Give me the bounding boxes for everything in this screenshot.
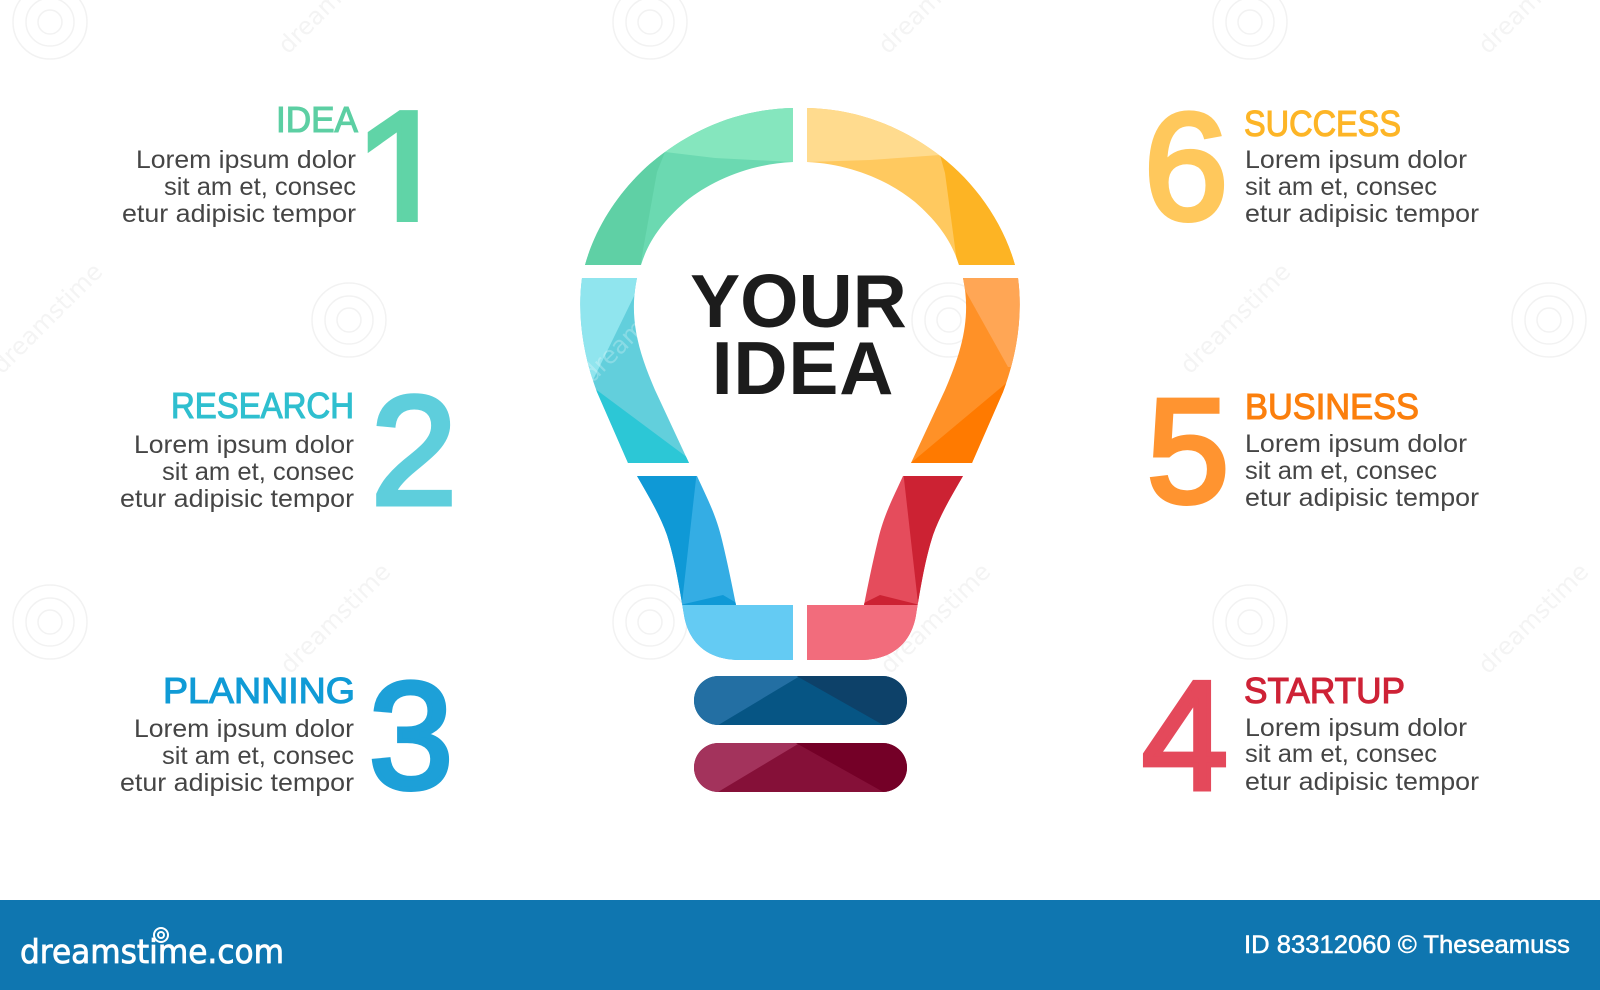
text block — [1245, 714, 1479, 796]
text block: Lorem ipsum dolor — [134, 715, 354, 743]
text block — [120, 431, 354, 513]
number 6: 6 — [1144, 82, 1228, 252]
panel: step 6 success — [1144, 82, 1479, 252]
text block: sit am et, consec — [162, 458, 354, 486]
number 5: 5 — [1147, 369, 1229, 534]
number 4: 4 — [1142, 649, 1228, 822]
text block: sit am et, consec — [1245, 740, 1437, 768]
text block: Lorem ipsum dolor — [1245, 430, 1467, 458]
text block: etur adipisic tempor — [1245, 768, 1479, 796]
bulb segment: green top left — [585, 108, 793, 265]
footer bar — [0, 900, 1600, 990]
text block: sit am et, consec — [1245, 173, 1437, 201]
icon: logo spiral — [154, 928, 168, 942]
number 2: 2 — [371, 364, 457, 537]
heading: idea: IDEA — [276, 99, 358, 140]
text block: sit am et, consec — [1245, 457, 1437, 485]
background watermark — [0, 0, 1594, 679]
text block — [1245, 146, 1479, 228]
text block: etur adipisic tempor — [120, 485, 354, 513]
text block — [1245, 430, 1479, 512]
text block: Lorem ipsum dolor — [134, 431, 354, 459]
panel: step 5 business — [1147, 369, 1479, 534]
background watermark: dreamstime — [274, 558, 396, 679]
heading: success: SUCCESS — [1244, 103, 1401, 144]
image id and credit: ID 83312060 © Theseamuss — [1244, 931, 1570, 959]
background watermark: dreamstime — [1174, 258, 1296, 379]
central title — [690, 259, 907, 410]
number 1: 1 — [352, 72, 456, 281]
heading: research: RESEARCH — [171, 385, 354, 426]
icon: light bulb — [570, 100, 1030, 798]
text block: etur adipisic tempor — [1245, 200, 1479, 228]
panel: step 4 startup — [1142, 649, 1479, 822]
bulb segment: red lower right — [807, 476, 963, 660]
text block: Lorem ipsum dolor — [136, 146, 356, 174]
logo text: dreamstime.com — [20, 932, 284, 971]
panel: step 1 idea — [123, 106, 418, 227]
number 3: 3 — [369, 651, 453, 821]
text block: etur adipisic tempor — [1245, 484, 1479, 512]
text block: Lorem ipsum dolor — [1245, 146, 1467, 174]
bulb segment: blue lower left — [637, 476, 793, 660]
panel: step 3 planning — [120, 651, 453, 821]
watermark over bulb: dreamstime — [576, 267, 698, 388]
background watermark: dreamstime — [874, 558, 996, 679]
text block: sit am et, consec — [164, 173, 356, 201]
background watermark: dreamstime — [1472, 558, 1594, 679]
heading: business: BUSINESS — [1245, 386, 1419, 427]
text block — [120, 715, 354, 797]
text block: etur adipisic tempor — [122, 200, 356, 228]
bulb segment: yellow top right — [807, 108, 1015, 265]
text block — [122, 146, 356, 228]
panel: step 2 research — [120, 364, 457, 537]
central title: IDEA — [712, 326, 894, 410]
bulb segment: cyan left — [580, 278, 689, 463]
bulb segment: orange right — [911, 278, 1020, 463]
bulb base bar: navy — [694, 676, 907, 725]
text block: Lorem ipsum dolor — [1245, 714, 1467, 742]
text block: etur adipisic tempor — [120, 769, 354, 797]
text block: sit am et, consec — [162, 742, 354, 770]
heading: planning: PLANNING — [163, 670, 355, 711]
central title: YOUR — [690, 259, 907, 343]
heading: startup: STARTUP — [1244, 670, 1405, 711]
bulb base bar: maroon — [694, 743, 907, 792]
